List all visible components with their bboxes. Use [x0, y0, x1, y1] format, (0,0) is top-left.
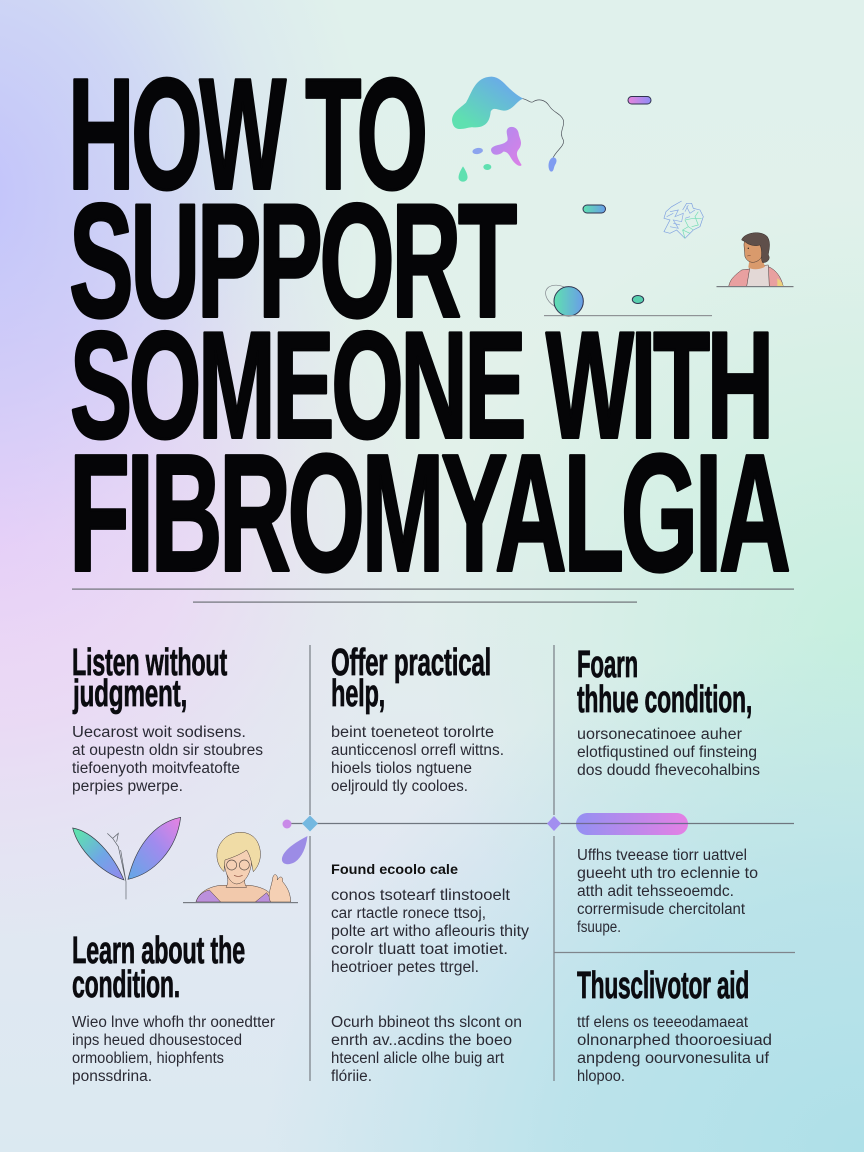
panel: thusclivotor aid: olnonarphed thooroesiuad [577, 1032, 772, 1049]
illustration: floating blobs [452, 77, 564, 182]
panel: found ecoolo cale: Found ecoolo cale [331, 861, 458, 877]
panel: learn about the condition [72, 930, 275, 1085]
text block: right middle: gueeht uth tro eclennie to [577, 865, 758, 882]
text block: lower middle [331, 1014, 522, 1085]
panel: listen without judgment: Uecarost woit sodisens. [72, 724, 246, 741]
panel: learn about the condition: Wieo lnve whofh thr oonedtter [72, 1014, 275, 1031]
panel: offer practical help: oeljrould tly cooloes. [331, 778, 468, 795]
panel: found ecoolo cale: car rtactle ronece ttsoj, [331, 905, 486, 922]
panel: foarn the condition: thhue condition, [577, 679, 752, 721]
ground line: person [716, 286, 794, 287]
icon: pink pill [628, 96, 651, 104]
panel: listen without judgment [72, 642, 263, 795]
panel: foarn the condition: elotfiqustined ouf finsteing [577, 744, 757, 761]
panel: listen without judgment: judgment, [72, 673, 187, 715]
panel: thusclivotor aid: anpdeng oourvonesulita uf [577, 1050, 770, 1067]
text block: lower middle: flóriie. [331, 1068, 372, 1085]
icon: brain scribble [664, 201, 703, 238]
text block: right middle [577, 847, 758, 936]
illustration: woman with glasses [196, 832, 291, 902]
panel: learn about the condition: ponssdrina. [72, 1068, 152, 1085]
panel: listen without judgment: Listen without [72, 642, 227, 684]
text block: lower middle: htecenl alicle olhe buig art [331, 1050, 505, 1067]
panel: learn about the condition: inps heued dhousestoced [72, 1032, 242, 1049]
text block: right middle: Uffhs tveease tiorr uattvel [577, 847, 747, 864]
panel: found ecoolo cale: conos tsotearf tlinstooelt [331, 887, 511, 904]
panel: thusclivotor aid: Thusclivotor aid [577, 965, 749, 1007]
top rules [72, 588, 794, 603]
text block: lower middle: enrth av..acdins the boeo [331, 1032, 512, 1049]
ground line: ball [544, 315, 712, 316]
panel: listen without judgment: tiefoenyoth moitvfeatofte [72, 760, 240, 777]
panel: foarn the condition [577, 644, 760, 779]
ground line: woman [183, 902, 298, 903]
panel: listen without judgment: perpies pwerpe. [72, 778, 183, 795]
panel: offer practical help: beint toeneteot torolrte [331, 724, 494, 741]
panel: offer practical help: aunticcenosl orrefl wittns. [331, 742, 504, 759]
icon: gradient ball [546, 285, 583, 316]
panel: found ecoolo cale: heotrioer petes ttrgel. [331, 959, 479, 976]
panel: learn about the condition: ormoobliem, hiophfents [72, 1050, 224, 1067]
panel: thusclivotor aid [577, 965, 772, 1085]
text block: right middle: corrermisude chercitolant [577, 901, 746, 918]
panel: thusclivotor aid: hlopoo. [577, 1068, 625, 1085]
panel: foarn the condition: uorsonecatinoee auher [577, 726, 742, 743]
text block: lower middle: Ocurh bbineot ths slcont on [331, 1014, 522, 1031]
timeline connector [282, 813, 794, 835]
icon: purple petal [282, 836, 308, 864]
panel: offer practical help: hioels tiolos ngtuene [331, 760, 472, 777]
panel: offer practical help: help, [331, 673, 385, 715]
panel: found ecoolo cale: corolr tluatt toat imotiet. [331, 941, 508, 958]
panel: thusclivotor aid: ttf elens os teeeodamaeat [577, 1014, 749, 1031]
panel: offer practical help: Offer practical [331, 642, 491, 684]
panel: foarn the condition: Foarn [577, 644, 638, 686]
panel: found ecoolo cale [331, 861, 529, 976]
panel: foarn the condition: dos doudd fhevecohalbins [577, 762, 760, 779]
panel: learn about the condition: condition. [72, 964, 180, 1006]
panel: found ecoolo cale: polte art witho afleouris thity [331, 923, 529, 940]
text block: right middle: atth adit tehsseoemdc. [577, 883, 734, 900]
icon: small green pill [632, 296, 644, 304]
text block: right middle: fsuupe. [577, 919, 621, 936]
panel: learn about the condition: Learn about the [72, 930, 245, 972]
illustration: seated person [729, 233, 783, 287]
panel: listen without judgment: at oupestn oldn sir stoubres [72, 742, 263, 759]
panel: offer practical help [331, 642, 504, 795]
title [68, 45, 789, 606]
column dividers [310, 645, 795, 1081]
icon: gradient leaves [73, 817, 181, 899]
icon: green pill [583, 205, 606, 213]
